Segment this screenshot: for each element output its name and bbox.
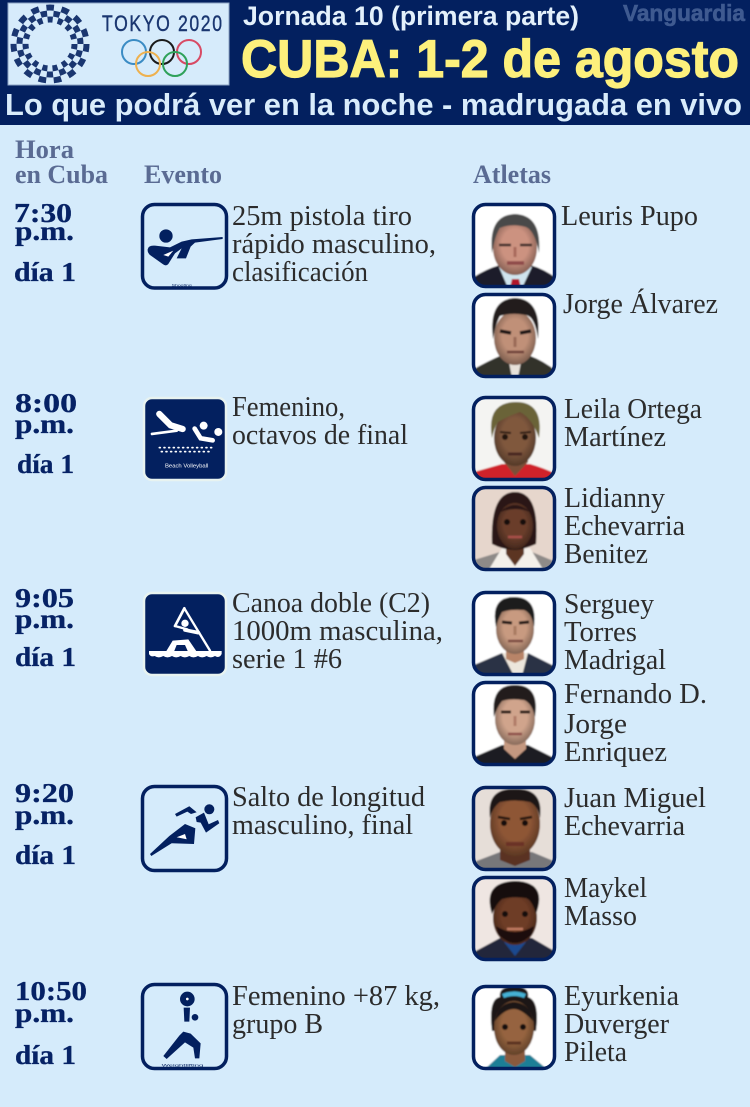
athlete name: Eyurkenia Duverger Pileta: Eyurkenia: [564, 981, 680, 1012]
subtitle: jornada: Jornada 10 (primera parte): [243, 1, 579, 31]
athlete photo: Juan Miguel Echevarria: [472, 786, 556, 871]
athlete name: Serguey Torres Madrigal: Torres: [564, 617, 637, 648]
event text: canoa: [232, 588, 443, 675]
event text: salto: masculino, final: [232, 810, 413, 841]
athlete name: Maykel Masso: [564, 873, 647, 932]
athlete name: Fernando D. Jorge Enriquez: Enriquez: [564, 737, 667, 768]
column heading: hora: [15, 135, 108, 189]
event text: pistola: [232, 201, 436, 288]
time: 7:30: 7:30: [14, 198, 72, 228]
time: 8:00: p.m.: [15, 409, 74, 439]
athlete name: Maykel Masso: Masso: [564, 901, 637, 932]
athlete photo: Serguey Torres: [472, 591, 556, 676]
athlete name: Lidianny Echevarria Benitez: Lidianny: [564, 483, 665, 514]
icon: weightlifting: [142, 984, 226, 1068]
athlete name: Fernando D. Jorge Enriquez: Jorge: [564, 709, 627, 740]
Tokyo 2020 wordmark: TOKYO 2020: [102, 12, 222, 37]
icon: beach volleyball: [144, 398, 226, 480]
icon: Olympic rings: [122, 40, 201, 76]
event text: canoa: 1000m masculina,: [232, 616, 443, 647]
time: 7:30: día 1: [14, 257, 76, 287]
time: 10:50: día 1: [15, 1040, 76, 1070]
time: 8:00: [15, 388, 77, 479]
Tokyo 2020 logo panel: [8, 3, 229, 85]
column heading: evento: Evento: [144, 160, 222, 189]
athlete photo: Maykel Masso: [472, 876, 556, 961]
event text: canoa: serie 1 #6: [232, 644, 342, 675]
time: 8:00: 8:00: [15, 388, 77, 418]
athlete name: Eyurkenia Duverger Pileta: Pileta: [564, 1037, 628, 1068]
column heading: hora: en Cuba: [15, 160, 108, 189]
event text: voleibol: Femenino,: [232, 392, 345, 423]
athlete name: Serguey Torres Madrigal: Serguey: [564, 589, 654, 620]
athlete name: Leila Ortega: Martínez: [564, 422, 666, 453]
column heading: atletas: Atletas: [473, 160, 551, 189]
athlete name: Juan Miguel Echevarria: [564, 783, 706, 842]
athlete name: Leila Ortega: [564, 394, 703, 453]
time: 9:05: 9:05: [15, 583, 74, 613]
event text: pistola: rápido masculino,: [232, 229, 436, 260]
athlete name: Juan Miguel Echevarria: Echevarria: [564, 811, 686, 842]
athlete name: Serguey Torres Madrigal: [564, 589, 666, 676]
icon: weightlifting: Weightlifting: [162, 1063, 203, 1067]
athlete photo: Fernando D. Jorge: [472, 681, 556, 766]
time: 9:05: [15, 583, 76, 672]
watermark: Vanguardia: Vanguardia: [623, 0, 745, 26]
athlete name: Lidianny Echevarria Benitez: Benitez: [564, 539, 648, 570]
time: 7:30: [14, 198, 76, 287]
subtitle: what to watch: Lo que podrá ver en la noche - madrugada en vivo: [5, 87, 742, 122]
icon: athletics runner: [142, 786, 226, 870]
icon: Tokyo 2020 emblem: [14, 8, 86, 80]
event text: pesas: grupo B: [232, 1009, 323, 1040]
time: 7:30: p.m.: [15, 216, 74, 246]
time: 9:05: día 1: [15, 642, 76, 672]
athlete name: Lidianny Echevarria Benitez: Echevarria: [564, 511, 686, 542]
event text: salto: Salto de longitud: [232, 782, 425, 813]
event text: pesas: Femenino +87 kg,: [232, 981, 440, 1012]
event text: voleibol: octavos de final: [232, 420, 408, 451]
column heading: hora: Hora: [15, 135, 74, 164]
athlete name: Juan Miguel Echevarria: Juan Miguel: [564, 783, 706, 814]
icon: shooting: [142, 204, 226, 288]
athlete name: Eyurkenia Duverger Pileta: [564, 981, 680, 1068]
athlete name: Maykel Masso: Maykel: [564, 873, 647, 904]
athlete name: Fernando D. Jorge Enriquez: Fernando D.: [564, 679, 707, 710]
time: 9:20: 9:20: [15, 778, 74, 808]
event text: pistola: 25m pistola tiro: [232, 201, 412, 232]
athlete photo: Jorge Álvarez: [472, 293, 556, 378]
time: 10:50: 10:50: [15, 976, 87, 1006]
athlete photo: Lidianny Echevarria: [472, 486, 556, 571]
header banner: [0, 0, 750, 125]
time: 9:05: p.m.: [15, 604, 74, 634]
time: 8:00: día 1: [17, 449, 74, 479]
athlete name: Eyurkenia Duverger Pileta: Duverger: [564, 1009, 670, 1040]
athlete photo: Leila Ortega: [472, 396, 556, 481]
athlete name: Jorge Álvarez: Jorge Álvarez: [563, 289, 718, 320]
athlete photo: Leuris Pupo: [472, 203, 556, 288]
athlete name: Serguey Torres Madrigal: Madrigal: [564, 645, 666, 676]
time: 10:50: [15, 976, 87, 1070]
event text: pistola: clasificación: [232, 257, 368, 288]
event text: pesas: [232, 981, 440, 1040]
athlete photo: Eyurkenia Duverger: [472, 985, 556, 1070]
icon: beach volleyball: Beach Volleyball: [165, 464, 208, 470]
athlete name: Leuris Pupo: Leuris Pupo: [561, 201, 698, 232]
time: 9:20: p.m.: [15, 800, 74, 830]
icon: canoe: [144, 593, 226, 675]
event text: salto: [232, 782, 425, 841]
event text: canoa: Canoa doble (C2): [232, 588, 430, 619]
athlete name: Fernando D. Jorge Enriquez: [564, 679, 707, 768]
athlete name: Lidianny Echevarria Benitez: [564, 483, 686, 570]
icon: shooting: Shooting: [172, 284, 192, 288]
time: 10:50: p.m.: [15, 998, 74, 1028]
event text: voleibol: [232, 392, 408, 451]
athlete name: Leila Ortega: Leila Ortega: [564, 394, 703, 425]
time: 9:20: [15, 778, 76, 870]
time: 9:20: día 1: [15, 840, 76, 870]
